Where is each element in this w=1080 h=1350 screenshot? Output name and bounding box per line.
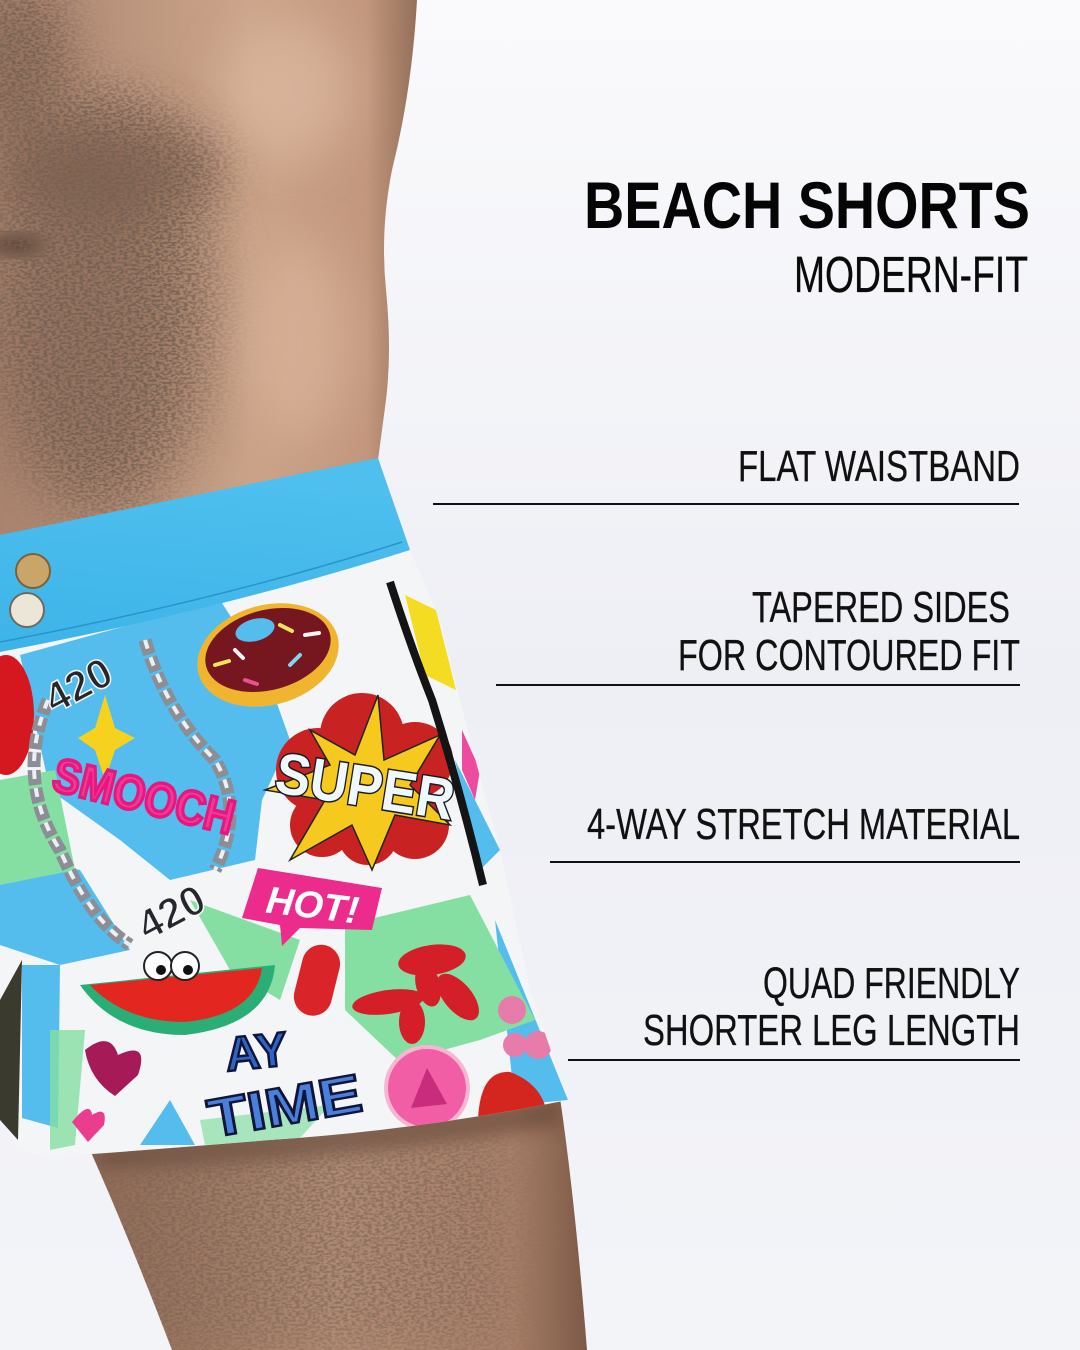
feature: quad friendly: [568, 959, 1020, 1061]
yellow sparkle: [78, 695, 135, 780]
waistband: [0, 458, 410, 652]
silver snap button: [10, 593, 44, 627]
gold snap button: [16, 554, 50, 588]
feature: tapered sides: [496, 583, 1020, 686]
hot badge: HOT!: [264, 880, 361, 933]
play time lettering: AY: [223, 1023, 290, 1082]
chain: [34, 640, 230, 945]
hot badge: [242, 868, 382, 946]
donut: [197, 603, 339, 707]
colourful graphic print: [0, 588, 568, 1150]
yellow side graphic: [405, 595, 456, 690]
smooch lettering: SMOOCH: [48, 749, 240, 845]
watermelon: [80, 952, 275, 1035]
balloon dog: [351, 940, 487, 1044]
leg: [80, 1098, 600, 1350]
play button: [386, 1047, 468, 1129]
shorts: [0, 458, 568, 1157]
side zipper: [390, 582, 483, 885]
waistband stitching: [0, 542, 402, 642]
red lips print: [0, 655, 34, 775]
play time lettering: TIME: [203, 1063, 366, 1149]
torso: [0, 0, 417, 540]
red apple: [478, 1072, 545, 1116]
title block: [584, 168, 1030, 303]
super burst: [265, 693, 459, 870]
green print patches: [0, 770, 535, 1150]
super burst: SUPER: [271, 741, 459, 833]
pink flowers: [498, 996, 552, 1059]
sky blue print patches: [0, 600, 568, 1145]
pink side graphic: [462, 730, 480, 800]
420 tag bottom: 420: [129, 875, 213, 949]
side panel dark edge: [0, 960, 22, 1140]
red pill: [294, 944, 340, 1016]
hearts: [85, 1041, 141, 1096]
420 tag top: 420: [36, 648, 120, 722]
shorts base print: [0, 550, 568, 1157]
play time lettering: [204, 1030, 364, 1136]
